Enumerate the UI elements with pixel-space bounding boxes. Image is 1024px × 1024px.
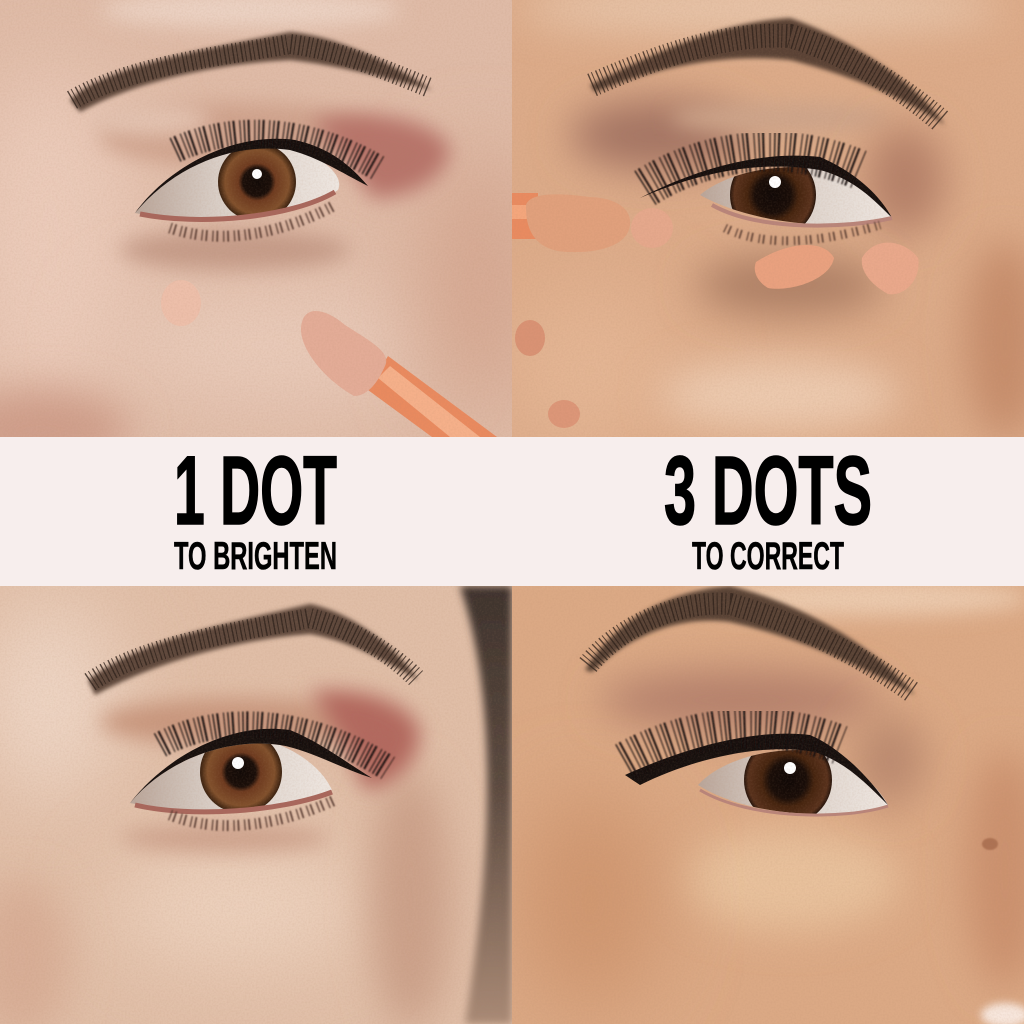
eyebrow: [88, 604, 418, 695]
eyeshadow: [570, 99, 750, 171]
hair at edge: [460, 586, 512, 1024]
eye: [130, 724, 388, 826]
heading: 1 dot: 1 DOT: [174, 436, 337, 545]
panel: top-right eye photo, three dots applied: [500, 0, 1024, 450]
text band: [0, 437, 1024, 586]
eyebrow: [590, 18, 945, 125]
eyebrow: [585, 586, 915, 695]
eye: [625, 728, 888, 824]
subheading: to brighten: TO BRIGHTEN: [174, 535, 337, 578]
subheading: to correct: TO CORRECT: [692, 535, 844, 578]
eye: [135, 133, 378, 236]
eyebrow: [70, 32, 432, 112]
panel: top-left eye photo, one dot applied: [0, 0, 512, 437]
concealer dot: [161, 280, 201, 326]
panel: bottom-right eye photo, blended result: [512, 580, 1024, 1024]
applicator wand: [301, 311, 497, 437]
concealer dots: [515, 208, 919, 428]
eyeshadow: [310, 114, 450, 198]
applicator wand: [512, 193, 630, 252]
panel: bottom-left eye photo, blended result: [0, 586, 512, 1024]
eyeshadow: [100, 698, 380, 746]
mole: [982, 838, 998, 850]
eye: [640, 152, 892, 241]
eyeshadow: [600, 670, 880, 730]
heading: 3 dots: 3 DOTS: [664, 436, 872, 545]
